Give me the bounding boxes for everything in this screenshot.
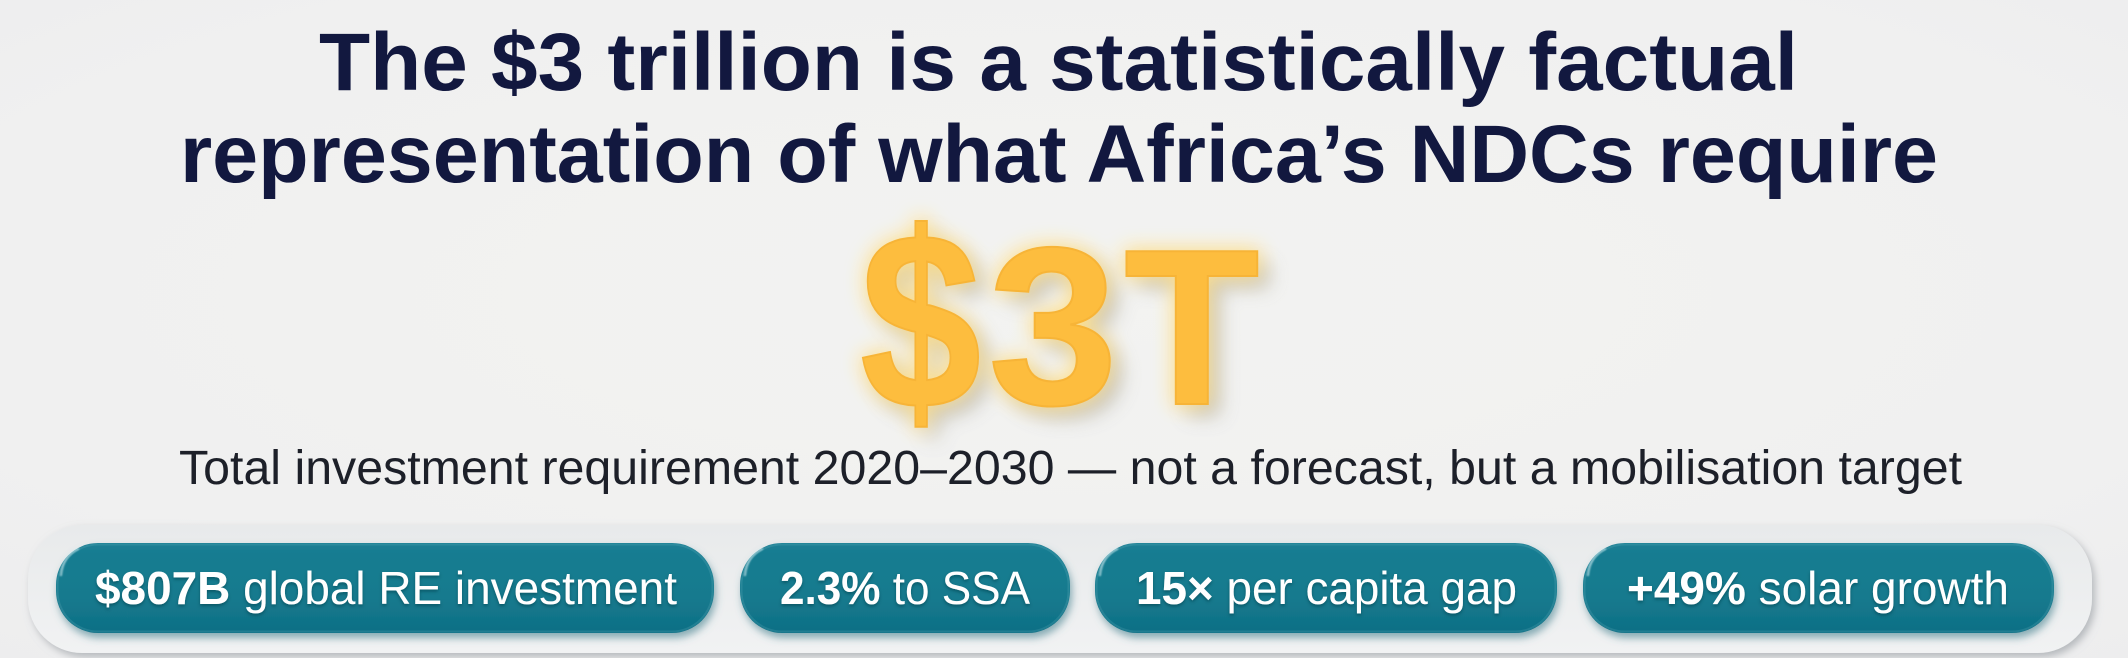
big figure: $3T: T: [1124, 204, 1260, 452]
panel: stat tray: [28, 525, 2092, 653]
stat pill: share to SSA: [740, 543, 1070, 633]
big figure: $3T: T: [1136, 216, 1272, 464]
stat pill: solar growth: +49% solar growth: [1627, 562, 2009, 614]
title: The $3 trillion is a statistically factual: [319, 17, 1798, 108]
stat pill: per capita gap: 15× per capita gap: [1136, 562, 1517, 614]
big figure: $3T: $: [860, 180, 981, 461]
big figure: $3T: T: [1124, 204, 1260, 452]
big figure: $3T: 3: [1000, 212, 1130, 464]
stat pill: per capita gap: [1095, 543, 1557, 633]
big figure: $3T: $: [872, 192, 993, 473]
title: [180, 17, 1938, 200]
stat pill: share to SSA: 2.3% to SSA: [780, 562, 1030, 614]
big figure: $3T: 3: [988, 200, 1118, 452]
stat pill: global RE investment: $807B global RE investment: [95, 562, 677, 614]
stat pill: global RE investment: [56, 543, 714, 633]
subtitle: Total investment requirement 2020–2030 — not a forecast, but a mobilisation target: [179, 442, 1962, 495]
big figure: $3T: 3: [988, 200, 1118, 452]
title: representation of what Africa’s NDCs require: [180, 109, 1938, 200]
big figure: $3T: $: [860, 180, 981, 461]
stat pill: solar growth: [1583, 543, 2054, 633]
big figure: $3T: [860, 180, 1272, 473]
